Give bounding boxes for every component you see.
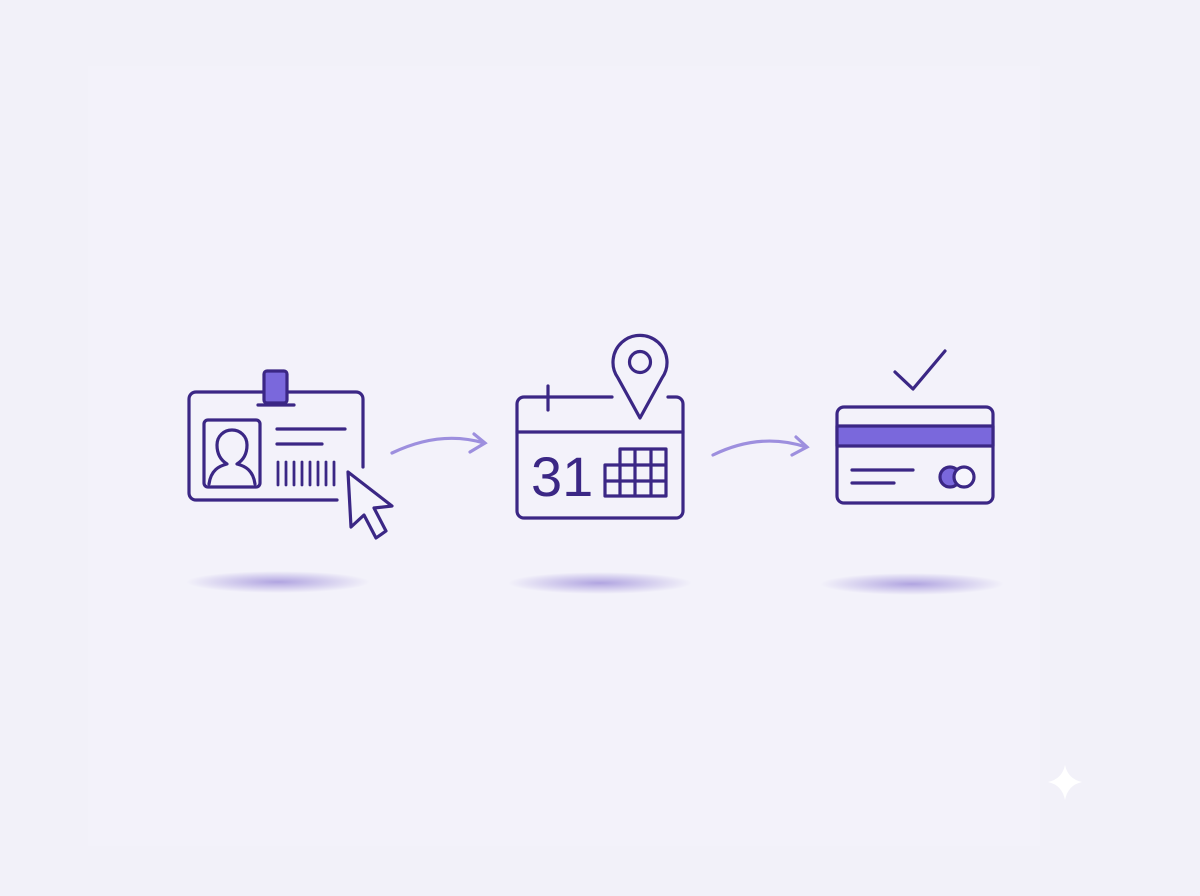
arrow 2	[713, 437, 807, 455]
icon: calendar with location pin	[517, 335, 683, 518]
shadow: calendar	[508, 572, 692, 594]
icon: credit card with checkmark	[837, 351, 993, 503]
icon: id badge with cursor	[189, 371, 392, 538]
arrow 1	[392, 434, 485, 453]
icon: sparkle	[1048, 765, 1082, 800]
shadow: credit card	[820, 573, 1004, 595]
icon: calendar with location pin: 31	[531, 445, 593, 508]
shadow: id card	[186, 571, 370, 593]
